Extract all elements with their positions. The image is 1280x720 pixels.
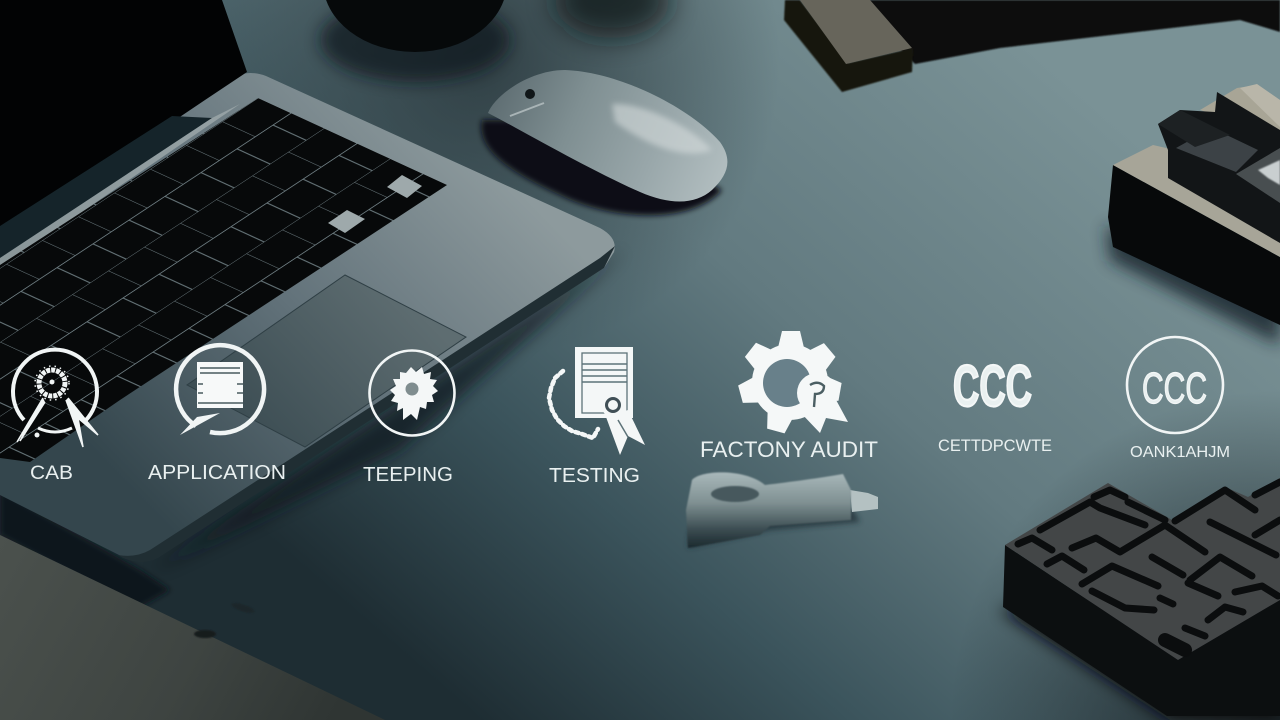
stamp top plate (1176, 128, 1258, 172)
stamp top plate right (1236, 148, 1280, 203)
laptop shadow (150, 250, 625, 572)
hinge highlight (0, 104, 240, 268)
stamp shadow (1106, 225, 1280, 345)
maze grooves (1018, 482, 1280, 650)
usb plug object (686, 472, 878, 548)
label: CAB: CAB (30, 463, 73, 484)
step: ANNUAL (1127, 337, 1230, 461)
stamp top wood (1200, 85, 1280, 135)
stamp badge (1258, 160, 1280, 185)
mouse highlight (612, 104, 712, 153)
dark tray (868, 0, 1280, 64)
icon: gear with badge (737, 331, 848, 435)
maze block top (1005, 478, 1280, 660)
maze shadow (1000, 560, 1280, 720)
plug connector (850, 490, 878, 512)
step: CAB (13, 350, 98, 484)
stamp base side (1108, 165, 1280, 325)
label: FACTORY AUDIT: FACTONY AUDIT (700, 437, 878, 462)
dark sphere object (320, 0, 510, 82)
keyboard (0, 98, 447, 462)
step: TESTING (549, 347, 645, 487)
mouse top shell (488, 70, 727, 202)
trackpad (187, 275, 466, 447)
wood block top right (784, 0, 1280, 92)
label: CERTIFICATE: CETTDPCWTE (938, 436, 1052, 455)
hinge bar (0, 116, 212, 258)
icon: CCC in ring: CCC (1142, 364, 1207, 413)
icon: CCC mark: CCC (953, 354, 1032, 419)
keyboard wide keys (328, 175, 422, 233)
mouse (481, 70, 727, 215)
step: APPLICATION (148, 345, 286, 484)
icon: document in ring (176, 345, 264, 435)
stamp base top (1113, 145, 1280, 257)
block top (800, 0, 912, 64)
mouse button (525, 89, 535, 99)
plug loop hole (711, 486, 759, 502)
stamp clip (1158, 110, 1230, 147)
label: TEEPING: TEEPING (363, 464, 453, 486)
label: TESTING: TESTING (549, 465, 640, 487)
mouse glint (510, 103, 544, 116)
icon: certificate with ribbon (549, 347, 645, 455)
plug body (686, 472, 851, 548)
block side (784, 0, 913, 92)
laptop front edge (118, 246, 615, 562)
stamp light strip (1240, 84, 1280, 127)
maze block side (1003, 545, 1280, 716)
stamp device right (1106, 84, 1280, 345)
step: TEEPING (363, 350, 454, 486)
plug shadow (688, 508, 860, 548)
mouse shadow (481, 120, 722, 215)
laptop screen (0, 0, 247, 238)
stamp inner body (1158, 92, 1280, 243)
icon: seal in ring (370, 350, 454, 436)
laptop cast shadow (0, 490, 170, 610)
wood surface bottom left (0, 490, 385, 720)
step: CERTIFICATE (938, 354, 1052, 455)
desk gouge (194, 630, 216, 638)
desk scratch (231, 601, 255, 615)
label: ANNUAL: OANK1AHJM (1130, 444, 1230, 461)
label: APPLICATION: APPLICATION (148, 462, 286, 484)
wood plank (0, 535, 385, 720)
step: FACTORY AUDIT (700, 331, 878, 462)
icon: rosette in ring (13, 350, 98, 447)
maze block bottom right (1000, 478, 1280, 720)
laptop (0, 0, 625, 572)
laptop base (0, 73, 615, 561)
dark object top centre (554, 0, 670, 38)
